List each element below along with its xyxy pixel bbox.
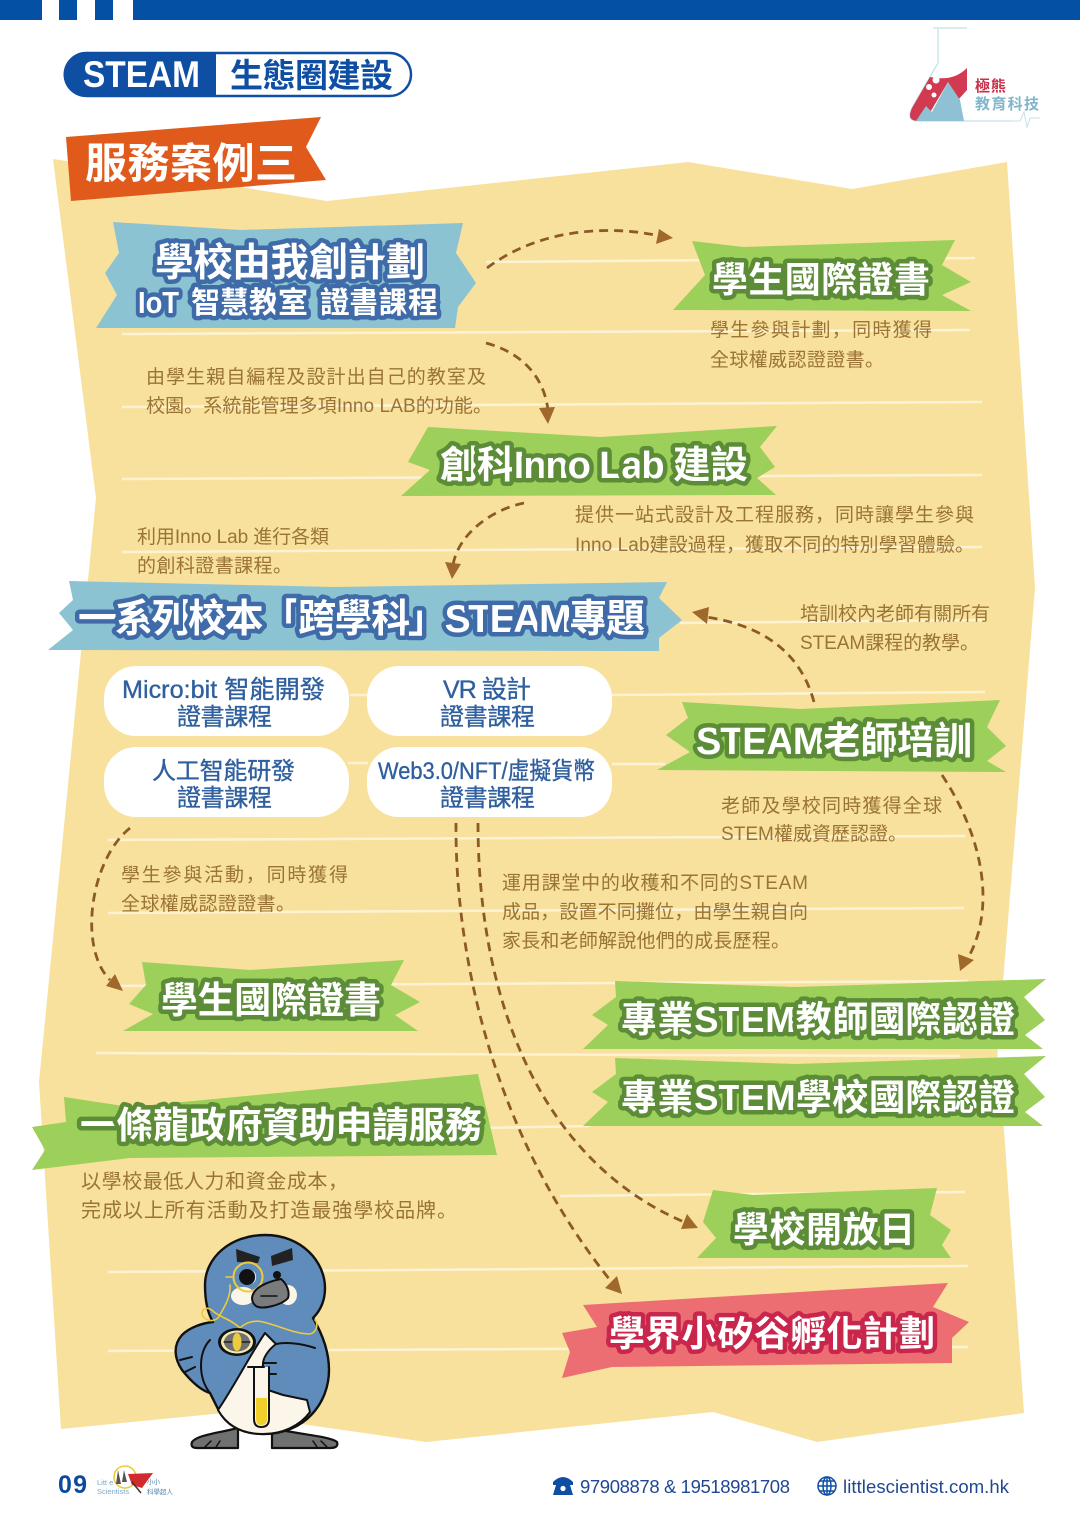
text: classroom outcomes [502,872,808,952]
banner: 專業STEM學校國際認證: 專業STEM學校國際認證 [621,1077,1015,1118]
text: classroom outcomes: 成品，設置不同攤位，由學生親自向 [502,901,808,923]
course pill: Micro:bit: 證書課程 [177,704,272,731]
arrow: courses to student certificate [92,828,130,991]
banner: 學界小矽谷孵化計劃: 學界小矽谷孵化計劃 [609,1313,935,1354]
course pill: VR: 證書課程 [440,704,535,731]
banner: 一系列校本跨學科 STEAM 專題: 一系列校本「跨學科」STEAM專題 [78,598,645,641]
text: classroom outcomes: 運用課堂中的收穫和不同的STEAM [502,872,808,894]
text: funding service: 以學校最低人力和資金成本， [81,1170,348,1193]
banner: 學校由我創計劃: 學校由我創計劃 [155,242,425,285]
text: teacher training description: STEAM課程的教學。 [800,632,979,654]
banner: 學校開放日: 學校開放日 [733,1209,915,1250]
penguin eyebrows [236,1248,293,1266]
monocle chain [202,1277,317,1334]
top colour bar [0,0,1080,20]
text: student certificate: 學生參與計劃，同時獲得 [710,319,932,341]
course pill: AI: 證書課程 [177,785,272,812]
banner: 學生國際證書: 學生國際證書 [712,259,930,300]
banner: 學生國際證書 (left) [123,960,420,1031]
text: teacher certificate [721,795,942,845]
section tag: 服務案例三: 服務案例三 [85,140,297,187]
logo: little scientists: 科學超人 [147,1487,174,1496]
text: classroom outcomes: 家長和老師解說他們的成長歷程。 [502,930,790,952]
text: student programming [146,366,492,417]
penguin belly [218,1333,310,1434]
course pill: AI [104,747,349,817]
penguin eye and monocle [234,1262,262,1292]
penguin feet [192,1428,337,1448]
text: student activity: 學生參與活動，同時獲得 [121,864,348,886]
banner: 一條龍政府資助申請服務: 一條龍政府資助申請服務 [80,1105,482,1146]
logo: polar bear education tech: 教育科技 [975,95,1039,113]
penguin body [176,1235,329,1434]
penguin wing lines [180,1340,315,1393]
logo: little scientists: 小小 [147,1477,160,1486]
penguin cheeks [231,1285,297,1305]
banner: 學校由我創計劃 [96,222,476,328]
banner: 學校由我創計劃: IoT [138,285,179,320]
banner: 學生國際證書 [673,240,971,311]
arrow: plan to certificate [487,229,673,268]
banner: 專業STEM教師國際認證 [583,979,1046,1049]
arrow: teacher training to series [692,607,814,702]
banner: 學校由我創計劃: 證書課程 [320,287,438,320]
arrow: plan to Inno Lab [486,343,555,424]
course pill: Web3 [367,747,612,817]
banner: 專業STEM學校國際認證 [583,1056,1046,1126]
mascot: penguin scientist [176,1235,337,1448]
logo: little scientists: Litt e [97,1478,113,1487]
banner: 學校由我創計劃: 智慧教室 [191,287,308,320]
header pill: STEAM 生態圈建設: STEAM [83,54,200,95]
logo: little scientists: Scientists [97,1487,129,1496]
banner: 一系列校本跨學科 STEAM 專題 [48,581,682,651]
contact: phone: 97908878 & 19518981708 [580,1476,790,1497]
text: student activity [121,864,348,915]
text: one-stop design [575,504,974,556]
section tag: 服務案例三 [66,117,326,201]
course pill: AI: 人工智能研發 [152,758,295,785]
text: student programming: 校園。系統能管理多項Inno LAB的功能。 [146,395,492,417]
banner: STEAM老師培訓 [657,700,1006,772]
text: student certificate: 全球權威認證證書。 [710,349,884,371]
text: teacher certificate: STEM權威資歷認證。 [721,823,907,845]
course pill: Micro:bit: Micro:bit 智能開發 [122,676,325,704]
text: one-stop design: Inno Lab建設過程，獲取不同的特別學習體驗。 [575,534,974,556]
text: teacher training description: 培訓校內老師有關所有 [800,603,990,625]
header pill: STEAM 生態圈建設 [64,52,411,97]
text: Inno Lab courses: 的創科證書課程。 [137,555,292,577]
penguin beak [252,1271,289,1307]
course pill: VR [367,666,612,736]
banner: 學校開放日 [697,1188,951,1258]
logo: polar bear education tech: 極熊 [975,77,1006,95]
banner: 專業STEM教師國際認證: 專業STEM教師國際認證 [621,999,1015,1040]
text: funding service [81,1170,457,1222]
page number: 09 [58,1471,87,1499]
banner: 一條龍政府資助申請服務 [32,1074,497,1170]
arrow: courses to incubation plan [456,823,622,1294]
text: teacher training description [800,603,990,654]
logo: polar bear education tech [910,28,1040,127]
paper background panel [39,159,1035,1442]
banner: 學生國際證書 (left): 學生國際證書 [161,980,381,1021]
test tube [248,1367,269,1427]
banner: 創科Inno Lab 建設: 創科Inno Lab 建設 [440,445,748,487]
course pill: Web3: Web3.0/NFT/虛擬貨幣 [378,758,595,785]
text: student activity: 全球權威認證證書。 [121,893,295,915]
text: student programming: 由學生親自編程及設計出自己的教室及 [146,366,486,388]
arrow: courses to open day [478,823,698,1229]
contact: website: littlescientist.com.hk [843,1476,1010,1497]
text: Inno Lab courses: 利用Inno Lab 進行各類 [137,526,329,548]
course pill: VR: VR 設計 [443,676,531,704]
banner: 學界小矽谷孵化計劃 [562,1283,969,1378]
text: Inno Lab courses [137,526,329,577]
header pill: STEAM 生態圈建設: 生態圈建設 [230,57,393,94]
banner: STEAM老師培訓: STEAM老師培訓 [696,721,972,763]
text: one-stop design: 提供一站式設計及工程服務，同時讓學生參與 [575,504,974,526]
course pill: Micro:bit [104,666,349,736]
banner: 創科Inno Lab 建設 [401,426,777,496]
text: funding service: 完成以上所有活動及打造最強學校品牌。 [81,1199,457,1222]
text: teacher certificate: 老師及學校同時獲得全球 [721,795,942,817]
arrow: Inno Lab to series [445,503,524,579]
arrow: teacher training to STEM certification [942,775,983,971]
globe badge [218,1328,256,1356]
course pill: Web3: 證書課程 [440,785,535,812]
text: student certificate [710,319,932,371]
logo: little scientists [97,1466,174,1496]
